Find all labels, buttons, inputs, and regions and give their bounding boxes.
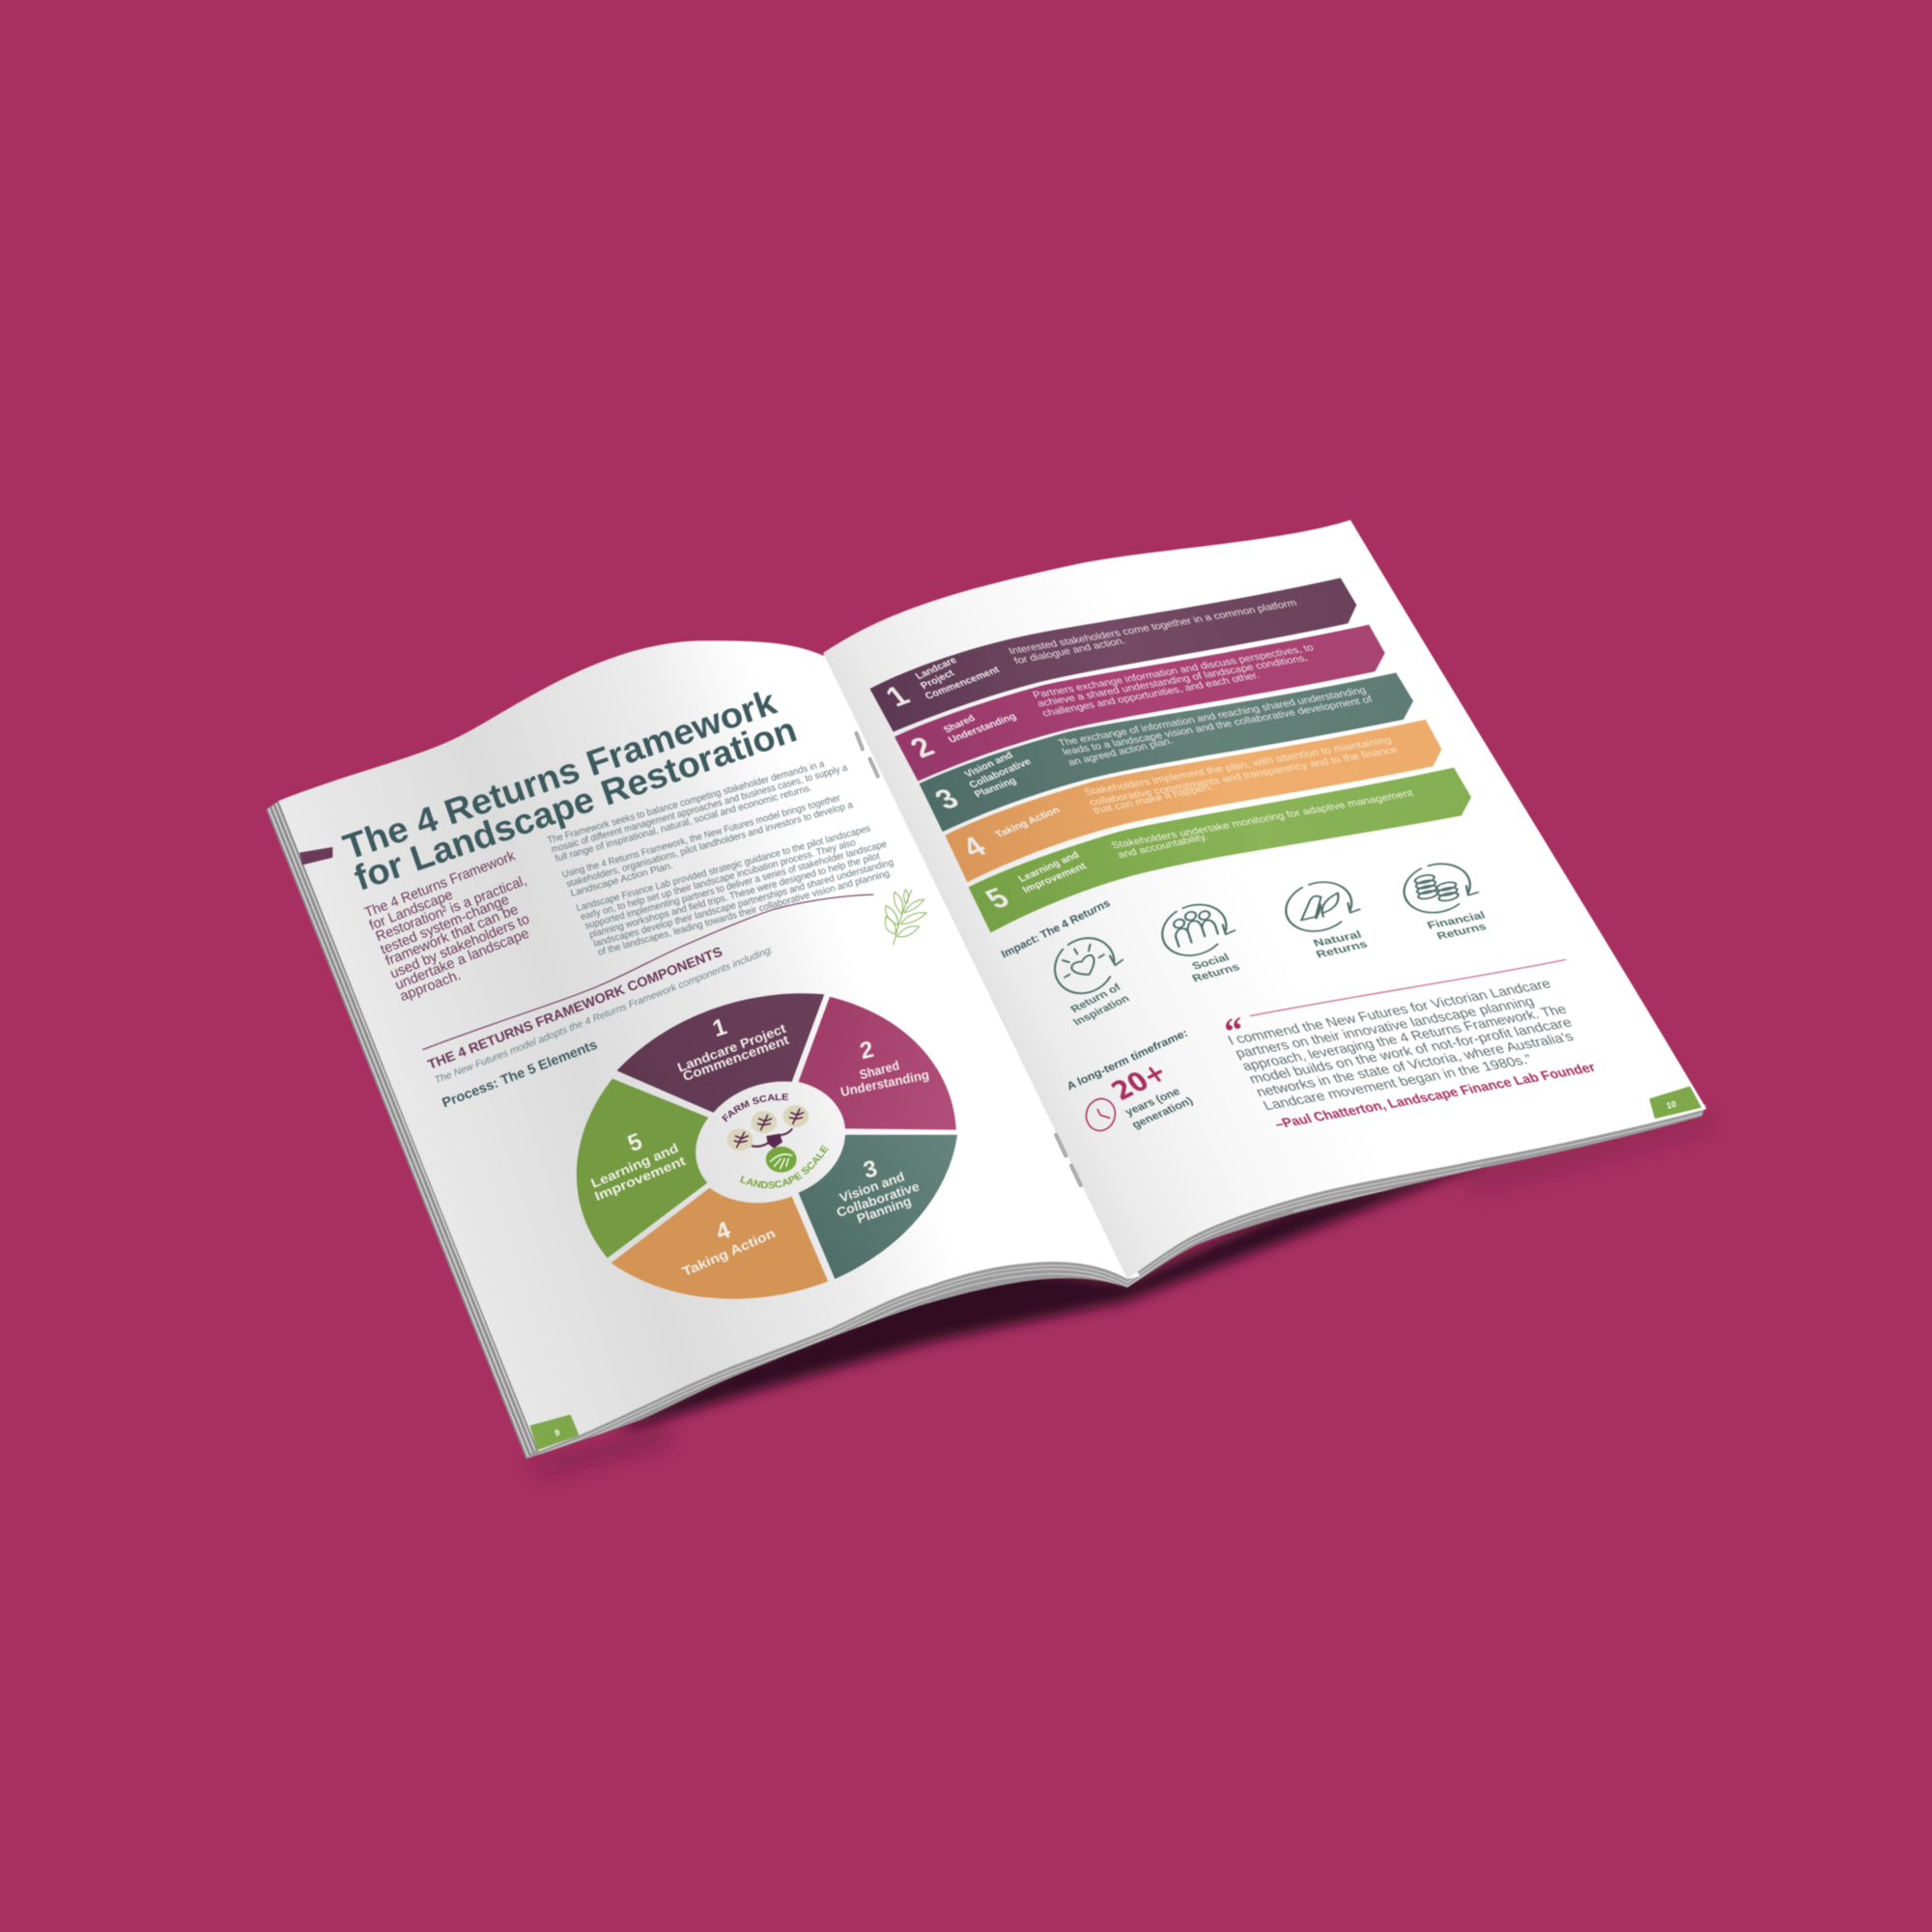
bar 2: Shared Understanding: 2 bbox=[903, 731, 941, 764]
intro text: approach. bbox=[398, 968, 463, 1005]
bar 2: Shared Understanding: achieve a shared understanding of landscape conditions, bbox=[1036, 653, 1310, 709]
stat: 20+ years bbox=[1105, 1057, 1196, 1131]
bar 3: Vision and Collaborative Planning: The exchange of information and reaching shared understanding bbox=[1057, 686, 1369, 749]
label: social returns: Social bbox=[1190, 952, 1232, 972]
label: natural returns: Natural bbox=[1312, 929, 1364, 950]
bar 2: Shared Understanding: Understanding bbox=[947, 712, 1018, 746]
bar 3: Vision and Collaborative Planning bbox=[920, 672, 1413, 832]
bar 5: Learning and Improvement: and accountability. bbox=[1116, 832, 1210, 861]
wedge 2: 2 bbox=[858, 1037, 876, 1065]
wheel centre: farm and landscape scale: LANDSCAPE SCALE bbox=[740, 1144, 829, 1189]
body paragraphs: full range of inspirational, natural, social and economic returns. bbox=[554, 782, 813, 865]
wedge 4: 4 bbox=[713, 1217, 734, 1246]
intro text: The 4 Returns Framework bbox=[362, 848, 518, 921]
title: for Landscape Restoration bbox=[350, 709, 802, 898]
quote attribution: –Paul Chatterton, Landscape Finance Lab Founder bbox=[1271, 1060, 1599, 1131]
panel: left page bbox=[278, 611, 1175, 1452]
wedge 5: Improvement bbox=[592, 1153, 688, 1204]
section heading: THE 4 RETURNS FRAMEWORK COMPONENTS bbox=[425, 944, 724, 1072]
bar 1: Landcare Project Commencement: Project bbox=[919, 668, 957, 692]
wheel centre: farm and landscape scale bbox=[721, 1094, 829, 1189]
wedge 3 bbox=[799, 1135, 957, 1279]
staples bbox=[856, 733, 1081, 1185]
wedge 3: Collaborative bbox=[835, 1179, 922, 1220]
bar 3: Vision and Collaborative Planning: Vision and bbox=[963, 751, 1015, 780]
panel: right page bbox=[823, 520, 1707, 1279]
bar 1: Landcare Project Commencement: Commencement bbox=[923, 665, 1003, 701]
label: social returns bbox=[1190, 952, 1242, 984]
wedge 5: Learning and bbox=[589, 1141, 681, 1191]
icon: quote mark: “ bbox=[1222, 1009, 1247, 1053]
timeframe heading: A long-term timeframe: bbox=[1063, 1027, 1191, 1093]
wedge 2 bbox=[799, 997, 956, 1130]
page stack edges bbox=[267, 801, 1713, 1466]
bar 5: Learning and Improvement: Learning and bbox=[1016, 850, 1082, 885]
bar 5: Learning and Improvement: Stakeholders undertake monitoring for adaptive management bbox=[1110, 788, 1415, 851]
section subtitle: The New Futures model adopts the 4 Returns Framework components including: bbox=[434, 945, 775, 1086]
label: social returns: Returns bbox=[1190, 962, 1242, 984]
body paragraphs: Using the 4 Returns Framework, the New Futures model brings together bbox=[561, 793, 842, 881]
label: return of inspiration bbox=[1068, 982, 1132, 1028]
icon: clock bbox=[1083, 1095, 1119, 1134]
bar 5: Learning and Improvement: 5 bbox=[979, 882, 1016, 915]
bar 4: Taking Action: Taking Action bbox=[993, 806, 1063, 840]
page number 9: 9 bbox=[554, 1428, 561, 1438]
icon: leaf sprig bbox=[885, 890, 926, 945]
body paragraphs: The Framework seeks to balance competing stakeholder demands in a bbox=[546, 758, 826, 846]
quote text: Landcare movement began in the 1980s.” bbox=[1261, 1051, 1535, 1113]
impact heading: Impact: The 4 Returns bbox=[998, 897, 1114, 960]
body paragraphs: supported implementing partners to deliver a series of stakeholder landscape bbox=[583, 838, 889, 932]
body paragraphs bbox=[546, 758, 895, 958]
bar 1: Landcare Project Commencement: for dialogue and action. bbox=[1012, 636, 1127, 667]
bar 4: Taking Action: 4 bbox=[955, 831, 993, 864]
bar 3: Vision and Collaborative Planning: Collaborative bbox=[967, 756, 1034, 790]
wedge 1 bbox=[617, 993, 824, 1113]
intro text: framework that can be bbox=[384, 902, 521, 969]
bar 2: Shared Understanding: Shared bbox=[942, 714, 978, 735]
icon: financial returns bbox=[1400, 857, 1480, 919]
wedge 1: Commencement bbox=[681, 1032, 791, 1084]
label: natural returns bbox=[1312, 929, 1370, 960]
wedge 1: Landcare Project bbox=[675, 1021, 788, 1075]
bar 3: Vision and Collaborative Planning: 3 bbox=[928, 782, 965, 815]
intro text: tested system-change bbox=[379, 893, 512, 958]
bar 4: Taking Action: collaborative commitments and transparency and to the finance bbox=[1088, 745, 1400, 809]
wedge 3: Vision and bbox=[838, 1169, 906, 1206]
intro text bbox=[362, 848, 532, 1005]
body paragraphs: stakeholders, organisations, pilot landholders and investors to develop a bbox=[565, 800, 855, 890]
intro text: Restoration² is a practical, bbox=[374, 873, 529, 945]
wedge 2: Understanding bbox=[839, 1067, 930, 1099]
bar 1: Landcare Project Commencement: 1 bbox=[879, 680, 916, 713]
right page sheet bbox=[823, 520, 1707, 1279]
wedge 5 bbox=[577, 1079, 708, 1258]
bar 3: Vision and Collaborative Planning: leads to a landscape vision and the collaborative development of bbox=[1061, 695, 1375, 757]
body paragraphs: mosaic of different management approaches and business cases, to supply a bbox=[551, 762, 849, 856]
icon: natural returns bbox=[1281, 874, 1362, 938]
intro text: used by stakeholders to bbox=[388, 912, 532, 982]
bar 2: Shared Understanding: Partners exchange information and discuss perspectives, to bbox=[1032, 642, 1316, 700]
bar 4: Taking Action: Stakeholders implement the plan, with attention to maintaining bbox=[1083, 735, 1394, 798]
icon: social returns bbox=[1155, 895, 1238, 963]
book shadow bbox=[529, 1114, 1716, 1476]
body paragraphs: Landscape Action Plan. bbox=[569, 861, 674, 899]
bar 2: Shared Understanding: challenges and opportunities, and each other. bbox=[1040, 670, 1262, 719]
process heading: Process: The 5 Elements bbox=[440, 1037, 600, 1110]
left page sheet bbox=[278, 640, 1140, 1452]
stat: 20+ years: 20+ bbox=[1105, 1057, 1173, 1107]
bar 3: Vision and Collaborative Planning: an agreed action plan. bbox=[1066, 736, 1176, 768]
body paragraphs: planning workshops and field trips. These were designed to help the pilot bbox=[588, 851, 881, 941]
bar 4: Taking Action: that can make it happen. bbox=[1092, 782, 1215, 816]
bar 4: Taking Action bbox=[945, 720, 1441, 882]
wedge 2: Shared bbox=[858, 1058, 901, 1082]
body paragraphs: early on, to help set up their landscape incubation process. They also bbox=[580, 838, 857, 923]
page number 10: 10 bbox=[1665, 1099, 1677, 1111]
quote text: partners on their innovative landscape planning bbox=[1233, 994, 1537, 1061]
section marker bar bbox=[299, 847, 332, 865]
bar 1: Landcare Project Commencement: Landcare bbox=[914, 656, 959, 682]
bar 1: Landcare Project Commencement: Interested stakeholders come together in a common platform bbox=[1008, 598, 1299, 657]
wedge 3: Planning bbox=[855, 1193, 913, 1226]
quote text: I commend the New Futures for Victorian Landcare bbox=[1225, 976, 1553, 1047]
quote text: networks in the state of Victoria, where Australia's bbox=[1253, 1029, 1576, 1099]
page number 10 bbox=[1649, 1086, 1701, 1119]
divider curve bbox=[423, 895, 873, 1050]
quote divider bbox=[1250, 959, 1566, 1016]
label: return of inspiration: Inspiration bbox=[1071, 993, 1132, 1028]
label: natural returns: Returns bbox=[1315, 939, 1370, 960]
label: return of inspiration: Return of bbox=[1068, 982, 1123, 1015]
bar 5: Learning and Improvement bbox=[969, 768, 1471, 933]
bar 5: Learning and Improvement: Improvement bbox=[1021, 862, 1090, 895]
quote text: model builds on the work of not-for-profit landcare bbox=[1246, 1014, 1575, 1086]
wedge 4 bbox=[611, 1188, 828, 1299]
wedge 5: 5 bbox=[624, 1128, 646, 1157]
wedge 4: Taking Action bbox=[680, 1226, 778, 1279]
intro text: for Landscape bbox=[367, 888, 455, 934]
brochure mockup scene bbox=[266, 520, 1707, 1480]
intro text: undertake a landscape bbox=[393, 926, 531, 993]
stat: 20+ years: generation) bbox=[1129, 1094, 1196, 1131]
title: The 4 Returns Framework bbox=[338, 682, 781, 867]
bar 3: Vision and Collaborative Planning: Planning bbox=[973, 776, 1019, 800]
wedge 3: 3 bbox=[861, 1155, 880, 1184]
chart: five element wheel bbox=[576, 993, 958, 1300]
wheel centre: farm and landscape scale: FARM SCALE bbox=[721, 1094, 788, 1122]
icon: return of inspiration bbox=[1045, 924, 1129, 1004]
stat: 20+ years: years (one bbox=[1122, 1085, 1183, 1119]
body paragraphs: landscapes develop their landscape partnerships and shared understanding bbox=[592, 857, 895, 950]
page number 9 bbox=[529, 1414, 579, 1450]
label: financial returns bbox=[1426, 910, 1489, 942]
body paragraphs: of the landscapes, leading towards their collaborative vision and planning. bbox=[597, 867, 894, 958]
label: financial returns: Returns bbox=[1435, 922, 1489, 942]
wedge 1: 1 bbox=[710, 1013, 730, 1042]
quote text: approach, leveraging the 4 Returns Framework. The bbox=[1239, 1002, 1570, 1073]
body paragraphs: Landscape Finance Lab provided strategic guidance to the pilot landscapes bbox=[575, 823, 871, 914]
bar 1: Landcare Project Commencement bbox=[870, 578, 1356, 732]
quote text bbox=[1225, 976, 1576, 1113]
bar 2: Shared Understanding bbox=[895, 625, 1385, 781]
label: financial returns: Financial bbox=[1426, 910, 1488, 931]
